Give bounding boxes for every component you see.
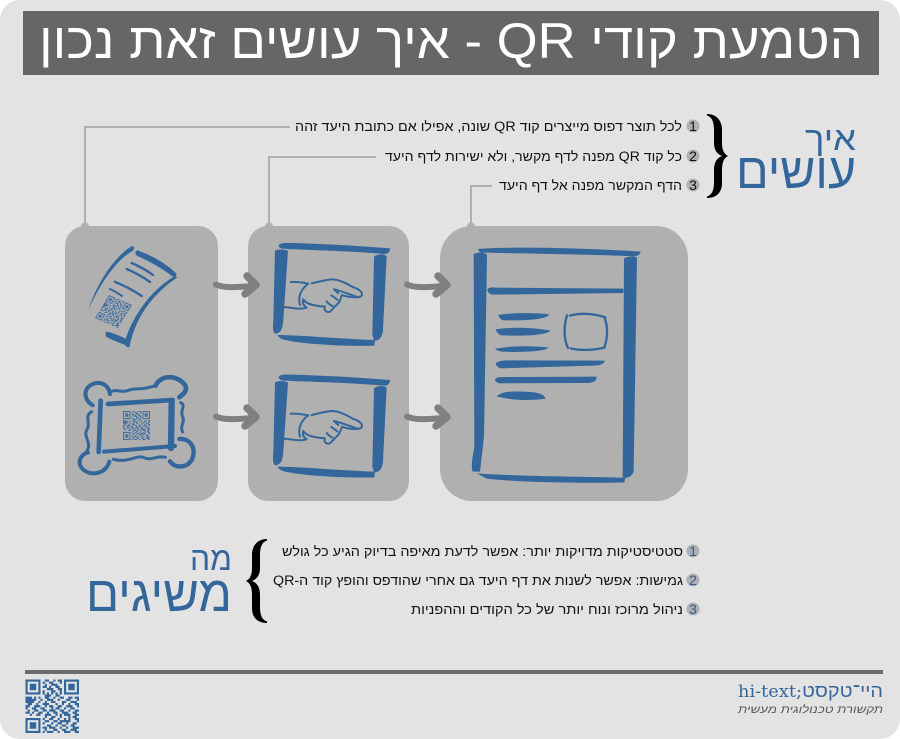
arrow: poster to link page top bbox=[216, 276, 256, 294]
benefit 2: גמישות: אפשר לשנות את דף היעד גם אחרי שהודפס והופץ קוד ה-QR bbox=[273, 573, 683, 588]
list item 1: 1 bbox=[689, 118, 697, 134]
list item 2: כל קוד QR מפנה לדף מקשר, ולא ישירות לדף היעד bbox=[385, 149, 682, 164]
list item 3: 3 bbox=[689, 177, 697, 193]
panel: destination page bbox=[440, 226, 688, 501]
title: הטמעת קודי QR - איך עושים זאת נכון bbox=[39, 13, 863, 69]
heading: how to do it bbox=[736, 120, 856, 199]
logo: hi-text: היי־טקסט bbox=[802, 681, 883, 701]
icon: pointing hand screen bottom bbox=[273, 375, 390, 478]
connector 3 bbox=[466, 186, 492, 228]
heading: what we gain: מה bbox=[190, 540, 232, 577]
icon: printed document with QR bbox=[88, 246, 177, 347]
footer rule bbox=[25, 670, 883, 674]
arrow: link page to destination bottom bbox=[407, 408, 447, 426]
brace: what we gain bbox=[246, 539, 267, 623]
panel: link pages bbox=[248, 226, 409, 501]
list item 1: לכל תוצר דפוס מייצרים קוד QR שונה, אפילו אם כתובת היעד זהה bbox=[295, 119, 682, 134]
icon: destination page sketch bbox=[472, 248, 641, 483]
list: what we gain bbox=[273, 543, 700, 617]
heading: how to do it: עושים bbox=[736, 143, 856, 199]
logo tagline: תקשורת טכנולוגית מעשית bbox=[737, 703, 883, 716]
arrow: link page to destination top bbox=[407, 276, 447, 294]
logo: hi-text: hi-text; bbox=[738, 682, 802, 702]
heading: what we gain bbox=[86, 540, 232, 622]
list: how to do it bbox=[295, 118, 700, 193]
brace: how to do it bbox=[707, 114, 728, 198]
connector 2 bbox=[264, 157, 376, 228]
arrow: poster to link page bottom bbox=[216, 408, 256, 426]
heading: how to do it: איך bbox=[805, 120, 856, 157]
footer QR code bbox=[26, 681, 79, 732]
list item 2: 2 bbox=[689, 148, 697, 164]
heading: what we gain: משיגים bbox=[86, 566, 232, 622]
panel: printed items bbox=[65, 226, 218, 501]
icon: framed poster with QR bbox=[80, 377, 194, 473]
title bar bbox=[23, 11, 879, 75]
benefit 3: 3 bbox=[689, 601, 697, 617]
logo: hi-text bbox=[738, 681, 883, 702]
list item 3: הדף המקשר מפנה אל דף היעד bbox=[499, 178, 682, 193]
benefit 3: ניהול מרוכז ונוח יותר של כל הקודים וההפניות bbox=[411, 602, 683, 617]
icon: pointing hand screen top bbox=[273, 243, 390, 346]
benefit 2: 2 bbox=[689, 572, 697, 588]
connector 1 bbox=[80, 127, 290, 228]
benefit 1: סטטיסטיקות מדויקות יותר: אפשר לדעת מאיפה בדיוק הגיע כל גולש bbox=[282, 544, 683, 559]
benefit 1: 1 bbox=[689, 543, 697, 559]
